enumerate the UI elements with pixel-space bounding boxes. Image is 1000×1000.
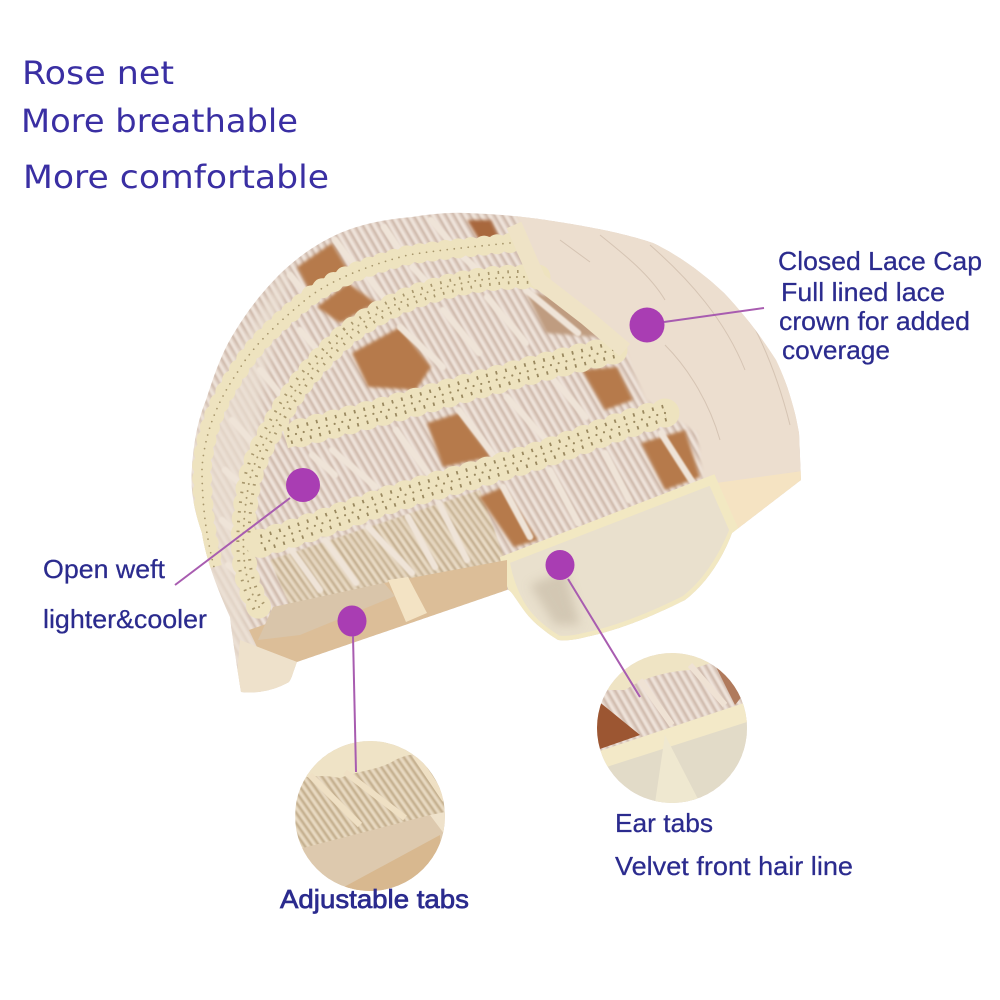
callout text: Full lined lace <box>781 277 945 307</box>
callout text: Open weft <box>43 554 166 584</box>
callout: closed lace cap <box>630 246 982 365</box>
ear tab shading <box>530 570 580 625</box>
auburn hair patches <box>297 220 700 547</box>
callout text <box>43 554 207 634</box>
callout text: crown for added <box>779 306 970 336</box>
leader line <box>353 636 356 772</box>
velvet tab <box>258 583 395 640</box>
marker dot: closed lace cap <box>630 308 664 342</box>
lower flap <box>238 641 297 692</box>
marker dot: open weft <box>286 468 320 502</box>
callout text: lighter&cooler <box>43 604 207 634</box>
lace trim: third band <box>285 350 613 437</box>
crown lace edge trim <box>514 225 625 350</box>
callout text: Adjustable tabs <box>280 884 469 914</box>
callout text: Velvet front hair line <box>615 851 853 881</box>
lace crown texture <box>560 235 790 440</box>
callout: adjustable tabs <box>280 606 469 914</box>
lace trim: top band <box>202 243 510 567</box>
heading line: Rose net: Rose net <box>22 54 174 92</box>
right beige tab <box>718 472 801 530</box>
band strap <box>388 577 427 622</box>
callout text: Closed Lace Cap <box>778 246 982 276</box>
lace trim: second band <box>243 277 538 610</box>
callout text: Ear tabs <box>615 808 713 838</box>
lace trim: fourth band <box>255 413 665 545</box>
heading: features list <box>21 54 329 196</box>
marker dot: adjustable tabs <box>338 606 366 636</box>
inset circle: ear tabs detail <box>597 653 747 803</box>
weft straps <box>222 220 693 590</box>
heading line: More breathable: More breathable <box>21 102 298 140</box>
heading line: More comfortable: More comfortable <box>23 158 329 196</box>
adjustable band <box>249 560 507 662</box>
marker dot: ear tabs <box>546 550 574 580</box>
closed lace crown <box>517 216 800 482</box>
wig cap illustration <box>192 212 801 692</box>
cap base with hair wefts <box>192 212 801 692</box>
callout text <box>615 808 853 881</box>
callout: open weft <box>43 468 320 634</box>
callout text <box>778 246 982 365</box>
leader line <box>664 308 764 322</box>
leader line <box>568 579 640 697</box>
ear tab mesh <box>505 480 734 640</box>
inset circle: adjustable tabs detail <box>295 741 445 900</box>
callout text: coverage <box>782 335 890 365</box>
leader line <box>175 498 290 585</box>
callout: ear tabs <box>546 550 853 881</box>
